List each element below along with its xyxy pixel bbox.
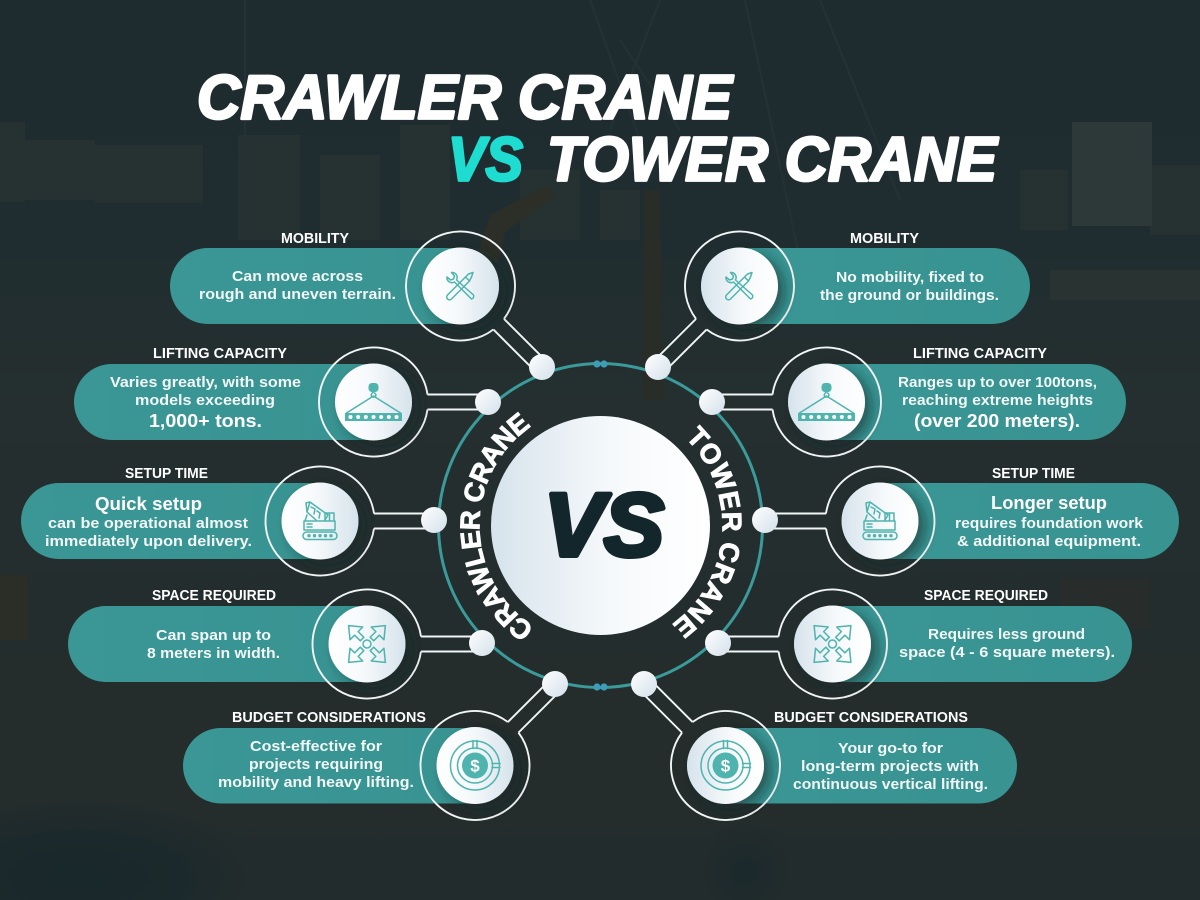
icon: four outward arrows bbox=[342, 619, 392, 669]
panel: tower space required: space (4 - 6 square meters). bbox=[899, 644, 1115, 661]
panel: tower setup time: requires foundation work bbox=[955, 515, 1144, 532]
panel: tower setup time: SETUP TIME bbox=[992, 466, 1075, 482]
panel: tower lifting capacity: Ranges up to over 100tons, bbox=[898, 374, 1097, 391]
panel: crawler budget considerations: mobility and heavy lifting. bbox=[218, 774, 414, 791]
title: VS bbox=[448, 126, 523, 194]
panel: tower setup time bbox=[752, 466, 1179, 576]
panel: tower lifting capacity: LIFTING CAPACITY bbox=[913, 346, 1047, 362]
panel: crawler setup time: SETUP TIME bbox=[125, 466, 208, 482]
panel: crawler lifting capacity: LIFTING CAPACITY bbox=[153, 346, 287, 362]
panel: crawler budget considerations: projects requiring bbox=[249, 756, 383, 773]
panel: tower budget considerations bbox=[609, 649, 1017, 843]
panel: tower mobility: the ground or buildings. bbox=[820, 287, 999, 304]
title bbox=[197, 64, 999, 194]
panel: crawler setup time: immediately upon delivery. bbox=[45, 533, 252, 550]
panel: tower space required: Requires less ground bbox=[928, 626, 1085, 643]
panel: tower space required: SPACE REQUIRED bbox=[924, 588, 1048, 604]
panel: tower setup time: Longer setup bbox=[991, 492, 1107, 513]
panel: tower budget considerations: continuous vertical lifting. bbox=[793, 776, 988, 793]
panel: crawler lifting capacity: Varies greatly, with some bbox=[110, 374, 301, 391]
panel: crawler budget considerations bbox=[183, 649, 591, 843]
panel: tower lifting capacity: reaching extreme heights bbox=[902, 392, 1093, 409]
title: TOWER CRANE bbox=[547, 126, 999, 194]
icon: wrench and screwdriver bbox=[726, 272, 753, 300]
panel: crawler space required: Can span up to bbox=[156, 627, 271, 644]
panel: crawler mobility: MOBILITY bbox=[281, 231, 349, 247]
icon: dollar target bbox=[701, 740, 750, 790]
central ring bbox=[438, 360, 762, 691]
panel: crawler setup time: can be operational almost bbox=[48, 515, 248, 532]
icon: crawler crane bbox=[303, 502, 337, 540]
panel: tower budget considerations: BUDGET CONSIDERATIONS bbox=[774, 710, 968, 726]
icon: crawler crane bbox=[863, 502, 897, 540]
panel: tower mobility: MOBILITY bbox=[850, 231, 919, 247]
panel: tower mobility: No mobility, fixed to bbox=[836, 269, 984, 286]
icon: wrench and screwdriver bbox=[447, 272, 474, 300]
panel: tower lifting capacity bbox=[699, 346, 1126, 456]
panel: tower lifting capacity: (over 200 meters). bbox=[914, 410, 1080, 431]
panel: tower budget considerations: long-term projects with bbox=[801, 758, 979, 775]
icon: dollar target: $ bbox=[470, 756, 480, 776]
panel: crawler lifting capacity bbox=[74, 346, 501, 456]
icon: four outward arrows bbox=[808, 619, 857, 669]
curved label: tower crane: TOWER CRANE bbox=[672, 424, 742, 639]
central VS badge: VS bbox=[544, 474, 664, 574]
panel: crawler budget considerations: BUDGET CONSIDERATIONS bbox=[232, 710, 426, 726]
panel: tower space required bbox=[705, 588, 1132, 698]
panel: crawler mobility: rough and uneven terrain. bbox=[199, 286, 396, 303]
panel: crawler budget considerations: Cost-effective for bbox=[250, 738, 382, 755]
panel: crawler mobility: Can move across bbox=[232, 268, 363, 285]
panel: crawler setup time bbox=[21, 466, 447, 576]
title: CRAWLER CRANE bbox=[197, 64, 734, 132]
panel: crawler lifting capacity: models exceeding bbox=[135, 392, 275, 409]
panel: crawler space required bbox=[68, 588, 495, 698]
panel: tower budget considerations: Your go-to for bbox=[838, 740, 943, 757]
central VS badge bbox=[491, 416, 710, 635]
panel: crawler space required: SPACE REQUIRED bbox=[152, 588, 276, 604]
panel: tower setup time: & additional equipment. bbox=[957, 533, 1141, 550]
curved label: crawler crane: CRAWLER CRANE bbox=[460, 412, 531, 639]
panel: crawler lifting capacity: 1,000+ tons. bbox=[149, 410, 262, 431]
icon: dollar target: $ bbox=[721, 756, 731, 776]
panel: crawler space required: 8 meters in width. bbox=[147, 645, 280, 662]
icon: crane load beam bbox=[798, 383, 855, 421]
panel: tower mobility bbox=[623, 209, 1030, 402]
icon: dollar target bbox=[450, 740, 500, 790]
panel: crawler setup time: Quick setup bbox=[95, 493, 202, 514]
panel: crawler mobility bbox=[170, 209, 577, 402]
icon: crane load beam bbox=[345, 383, 402, 421]
